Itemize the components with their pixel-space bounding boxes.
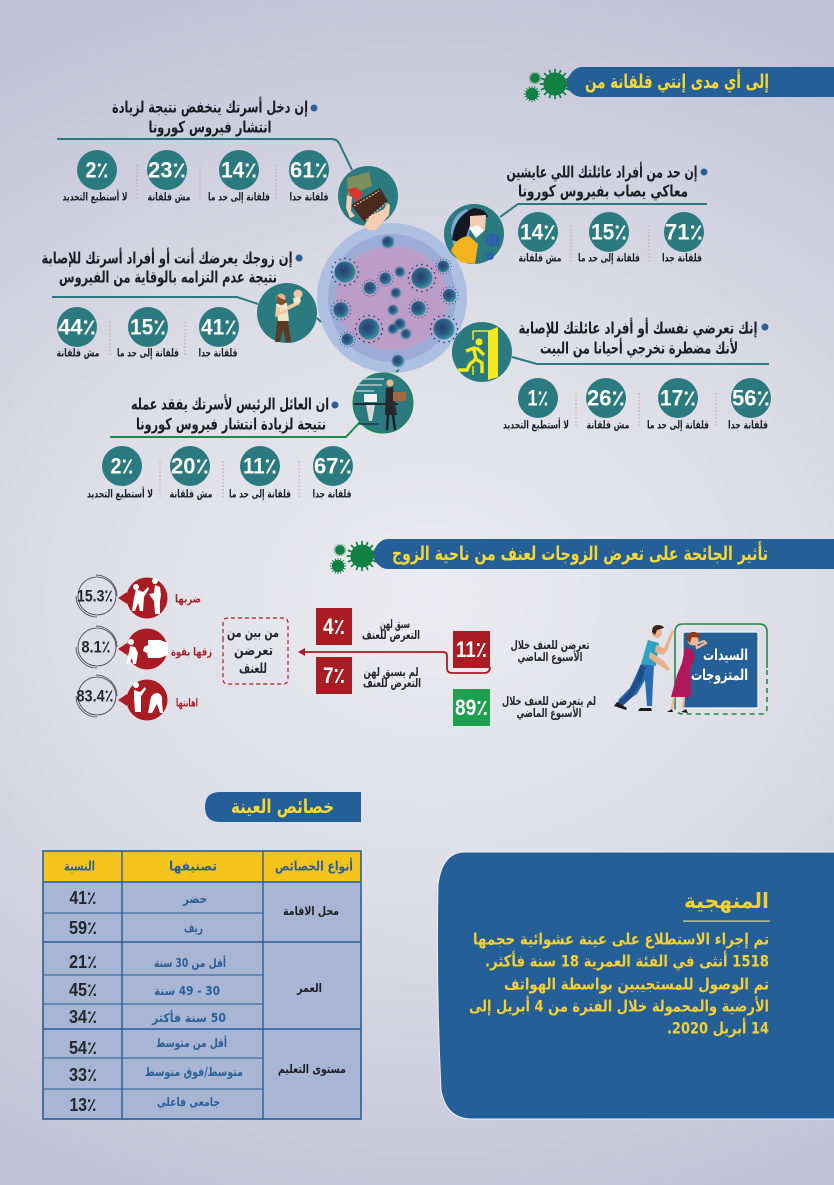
column: categories: أقل من متوسط [156,1035,227,1051]
stat: 14: مش قلقانة [518,252,562,264]
column: categories: ريف [184,921,203,935]
stat: 67: قلقانة جدا [312,488,352,500]
stat: 11 experienced violence: 11٪ [456,637,487,662]
stat: hit: 15.3٪ [77,586,113,606]
label: married women: المتزوجات [691,666,748,684]
stat: 11 experienced violence: الأسبوع الماضي [518,649,582,665]
stat: 2: لا أستطيع التحديد [62,190,128,204]
heading: breadwinner [131,394,329,434]
stat: 17 [647,378,709,432]
stat: insulted: اهانتها [176,696,198,710]
icon: office worker with box [353,373,413,433]
stat: insulted [76,675,198,720]
stat: 26: 26٪ [587,386,625,410]
central virus circle [317,223,467,373]
stat: 14 [518,212,562,264]
stat: 1: 1٪ [528,386,548,410]
dashed box: among those exposed: من بين من [227,625,279,641]
column: percentages: 41٪ [70,888,96,908]
bullet [332,402,338,408]
stat: pushed forcefully [76,626,212,670]
stat: insulted: 83.4٪ [76,686,114,706]
stat: 14: 14٪ [520,220,556,244]
stat: 2 [87,446,153,500]
table header row: النسبة [64,860,95,874]
stat: 15 [578,212,640,264]
stat: 71 [662,212,704,264]
connector [512,357,769,364]
stat: pushed forcefully: 8.1٪ [82,638,110,656]
column: categories: متوسط/فوق متوسط [145,1065,243,1080]
stat: 11: 11٪ [243,454,277,478]
stat: 4 previously exposed: التعرض للعنف [362,628,420,642]
stat: 61: قلقانة جدا [290,190,328,204]
bullet [296,254,302,262]
stat: 14: قلقانة إلى حد ما [208,190,270,204]
stat: 26 [586,378,630,432]
connector [52,297,321,322]
stat: 56: 56٪ [732,386,770,410]
column: categories: 30 - 49 سنة [154,984,220,998]
stat: 1 [503,378,569,432]
column: categories: حضر [182,892,207,906]
dashed box: among those exposed: للعنف [239,661,267,677]
column: percentages: 33٪ [69,1065,97,1085]
stat: 11 experienced violence [453,631,590,668]
stat: 1: لا أستطيع التحديد [503,418,569,432]
panel: husband exposes family [42,248,321,360]
icon: father with child [257,283,317,343]
stat: hit [76,575,201,618]
heading: leaving home: لأنك مضطرة تخرجي أحيانا من البيت [540,338,738,358]
stat: 41 [198,307,239,360]
stat: 7 not previously exposed: التعرض للعنف [363,676,421,690]
stat: 23: مش قلقانة [148,190,190,204]
heading: family member: معاكي يصاب بفيروس كورونا [518,182,688,202]
icon: wallet in hand [338,166,398,230]
stat: 15: 15٪ [591,220,627,244]
heading: household income [112,96,308,136]
blue box [683,632,758,708]
heading: household income: إن دخل أسرتك ينخفض نتيجة لزيادة [112,96,308,116]
stat: 11: قلقانة إلى حد ما [229,488,291,500]
panel: married women [614,624,767,714]
stat: 14 [208,150,270,204]
stat: 2: لا أستطيع التحديد [87,486,153,500]
stat: pushed forcefully: زقها بقوة [171,646,212,658]
bullet [310,104,318,112]
stat: 11 experienced violence: تعرضن للعنف خلال [510,638,590,652]
panel: breadwinner job loss [87,370,413,500]
stat: 20 [170,446,212,500]
stat: 4 previously exposed: 4٪ [323,614,345,639]
stat: 67 [312,446,353,500]
bullet [762,324,768,330]
stat: 7 not previously exposed [316,657,421,694]
column: percentages: 21٪ [69,952,97,972]
stat: 11 [229,446,291,500]
column: percentages: 13٪ [70,1095,96,1115]
stat: 2: 2٪ [86,158,108,182]
stat: 7 not previously exposed: لم يسبق لهن [364,665,418,679]
methodology heading: المنهجية [684,889,769,913]
stat: 41: 41٪ [201,314,237,340]
stat: 67: 67٪ [314,454,352,478]
column: characteristic types: العمر [296,981,322,995]
methodology text: 1518 أنثى في الفئة العمرية 18 سنة فأكثر. [485,950,769,972]
stat: 15: قلقانة إلى حد ما [578,252,640,264]
section header: sample characteristics [205,792,361,822]
bullet [700,168,708,176]
stat: 61: 61٪ [290,158,328,182]
label: married women: السيدات [703,646,748,664]
panel: methodology [437,852,834,1119]
heading: breadwinner: ان العائل الرئيس لأسرتك يفقد عمله [131,394,329,414]
green frame [675,624,767,708]
column: categories: جامعى فاعلى [157,1095,220,1109]
column: characteristic types: مستوى التعليم [278,1062,346,1077]
icon: woman coughing with mask [444,204,504,264]
heading: husband: إن زوجك يعرضك أنت أو أفراد أسرتك للإصابة [42,248,292,268]
stat: 7 not previously exposed: 7٪ [323,663,345,688]
column: categories [145,892,243,1109]
column: percentages: 54٪ [69,1038,97,1058]
stat: 14: 14٪ [221,158,257,182]
stat: 15: 15٪ [130,314,166,340]
connector [110,370,399,437]
stat: 89 not exposed [453,689,596,726]
column: categories: 50 سنة فأكثر [151,1010,226,1025]
section header: violence [330,539,834,574]
methodology text: تم الوصول للمستجيبين بواسطة الهواتف [504,974,769,994]
heading: leaving home [518,318,758,358]
dashed box: among those exposed: تعرضن [234,643,273,659]
stat: 56 [728,378,771,432]
icon: emergency exit door [452,322,512,382]
stat: 44 [56,307,100,360]
stat: 2 [62,150,128,204]
table: sample characteristics [43,851,361,1119]
table header row: تصنيفها [169,860,217,874]
stat: 4 previously exposed: سبق لهن [380,617,410,631]
stat: 20: 20٪ [171,454,209,478]
stat: 20: مش قلقانة [170,488,212,500]
column: characteristic types: محل الاقامة [283,904,339,918]
column: percentages: 34٪ [69,1007,97,1027]
heading: husband [42,248,292,286]
stat: 15: قلقانة إلى حد ما [117,346,179,360]
dashed box: among those exposed [223,618,288,684]
stat: 44: 44٪ [58,314,96,340]
column: categories: أقل من 30 سنة [154,955,226,970]
stat: 15 [117,307,179,360]
methodology text: تم إجراء الاستطلاع على عينة عشوائية حجمها [473,930,769,948]
column: percentages [69,888,97,1115]
heading: family member: إن حد من أفراد عائلتك اللي عايشين [506,162,698,182]
stat: hit: ضربها [175,592,201,606]
stat: 56: قلقانة جدا [728,418,768,432]
stat: 2: 2٪ [110,454,134,478]
connector [500,204,707,217]
stat: 44: مش قلقانة [56,346,100,360]
stat: 89 not exposed: لم يتعرضن للعنف خلال [502,694,596,708]
connector [57,139,352,170]
stat: 61 [289,150,329,204]
section header: sample characteristics: خصائص العينة [231,796,334,818]
heading: household income: انتشار فيروس كورونا [148,118,272,136]
heading: family member [506,162,698,202]
heading: breadwinner: نتيجة لزيادة انتشار فيروس كورونا [136,414,326,434]
column: percentages: 59٪ [69,918,97,938]
arrow: from 11 percent to subgroup [298,648,490,673]
methodology text: الأرضية والمحمولة خلال الفترة من 4 أبريل إلى [469,996,769,1016]
methodology text [469,930,769,1038]
stat: 4 previously exposed [316,608,420,645]
stat: 71: قلقانة جدا [662,252,702,264]
stat: 89 not exposed: الأسبوع الماضي [516,705,582,721]
stat: 26: مش قلقانة [586,418,630,432]
table header row: أنواع الخصائص [275,858,353,874]
stat: 17: 17٪ [660,386,696,410]
illustration: man pushing woman [614,625,706,713]
column: percentages: 45٪ [69,980,97,1000]
table header row [64,858,353,874]
label: married women [691,646,748,684]
stat: 89 not exposed: 89٪ [455,695,488,720]
panel: forced to leave home [452,318,771,432]
stat: 17: قلقانة إلى حد ما [647,418,709,432]
stat: 71: 71٪ [665,220,703,244]
panel: household income [57,96,398,230]
stat: 41: قلقانة جدا [198,346,238,360]
section header: how worried [524,67,834,102]
stat: 23: 23٪ [148,158,186,182]
column: characteristic types [278,904,346,1077]
stat: 23 [147,150,190,204]
panel: family member infected [444,162,708,264]
methodology text: 14 أبريل 2020. [667,1018,769,1038]
heading: husband: نتيجة عدم التزامه بالوقاية من الفيروس [59,268,277,286]
